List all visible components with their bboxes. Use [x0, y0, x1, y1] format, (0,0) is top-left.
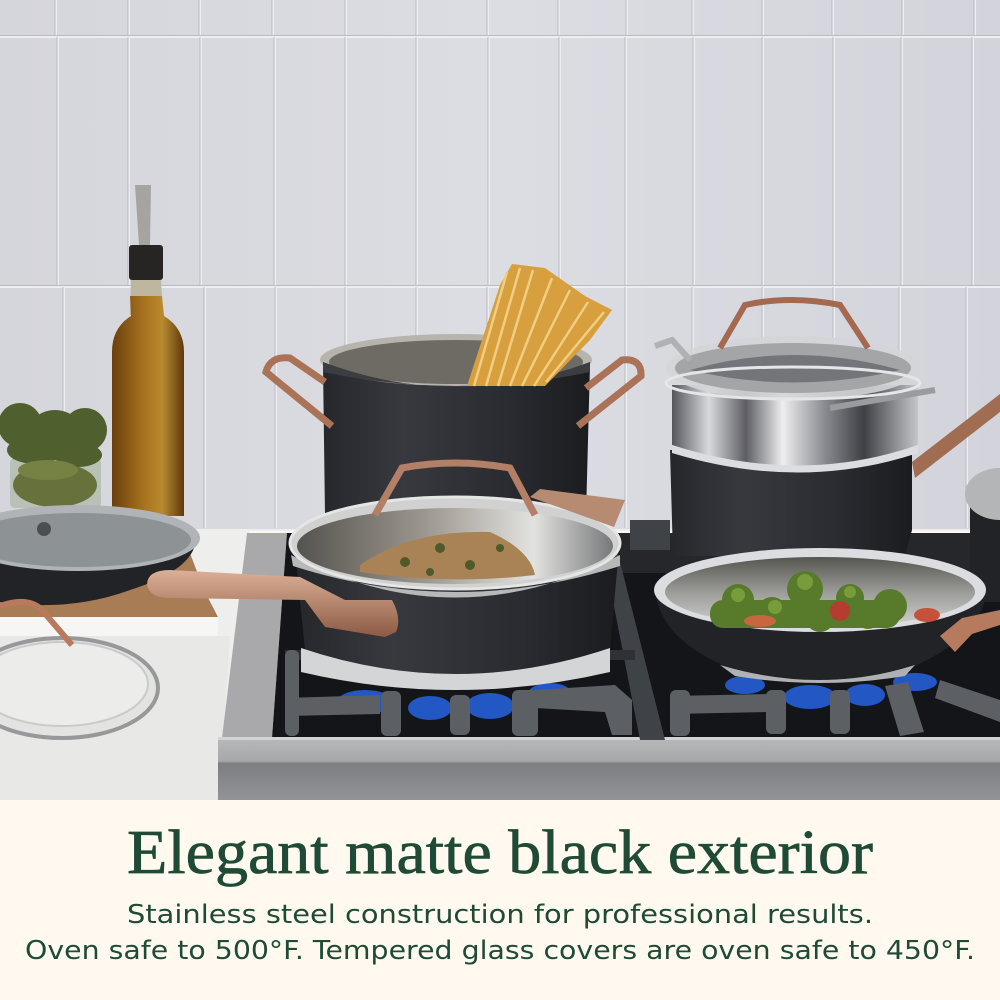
- caption panel: [0, 800, 1000, 1000]
- body text: Stainless steel construction for professional results.: [127, 900, 873, 930]
- body text: Oven safe to 500°F. Tempered glass covers are oven safe to 450°F.: [25, 936, 975, 966]
- saute pan with glass lid and salmon: [147, 463, 625, 690]
- saucepan with steamer insert and lid: [655, 300, 1000, 556]
- frying pan on board: [0, 505, 200, 605]
- countertop: [0, 529, 250, 800]
- heading: Elegant matte black exterior: [127, 819, 873, 887]
- large stock pot with pasta: [266, 264, 641, 515]
- skillet with broccoli: [654, 548, 1000, 683]
- wooden cutting board: [0, 548, 218, 636]
- vegetables: [710, 571, 940, 632]
- loose glass lid: [0, 602, 158, 738]
- salmon: [360, 532, 535, 579]
- long copper handle: [147, 570, 398, 637]
- body text: [25, 900, 975, 966]
- stove: [218, 533, 1000, 800]
- stove grates and burners: [285, 520, 1000, 740]
- tiled wall background: [0, 0, 1000, 530]
- olive oil bottle: [112, 185, 184, 516]
- pasta: [467, 264, 612, 386]
- pot at right edge: [965, 468, 1000, 602]
- herbs in glass: [0, 403, 107, 508]
